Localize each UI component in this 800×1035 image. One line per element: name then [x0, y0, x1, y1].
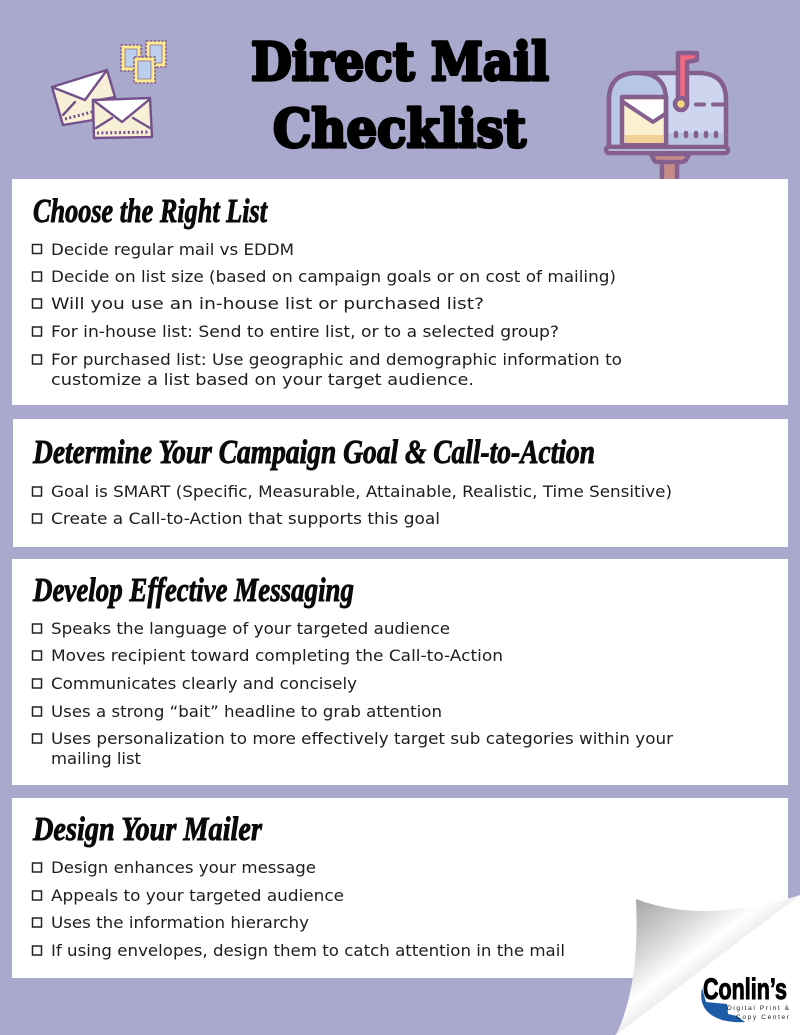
heading: design: Design Your Mailer: [32, 811, 263, 848]
heading: campaign goal: Determine Your Campaign Goal & Call-to-Action: [32, 434, 595, 471]
checklist: list items: [32, 240, 622, 389]
checklist: list items: customize a list based on your target audience.: [51, 370, 474, 389]
shelf: [606, 147, 728, 153]
checklist: list items: Decide on list size (based on campaign goals or on cost of mailing): [51, 267, 616, 286]
heading: messaging: Develop Effective Messaging: [32, 572, 354, 609]
checklist: goal items: Create a Call-to-Action that supports this goal: [51, 509, 440, 528]
checklist: messaging items: Moves recipient toward completing the Call-to-Action: [51, 646, 503, 665]
logo: Conlin's: Digital Print &: [727, 1005, 790, 1012]
letter: [622, 97, 666, 145]
checklist: list items: Will you use an in-house list or purchased list?: [51, 294, 484, 313]
checklist: design items: Appeals to your targeted audience: [51, 886, 344, 905]
checklist: messaging items: Communicates clearly and concisely: [51, 674, 357, 693]
page curl: [615, 895, 800, 1035]
checklist: list items: For purchased list: Use geographic and demographic information to: [51, 350, 622, 369]
dashes: [696, 102, 724, 106]
title: [251, 32, 549, 160]
post: [662, 158, 677, 182]
door: [609, 73, 666, 147]
logo: Conlin's: Copy Center: [736, 1014, 790, 1021]
checklist: messaging items: [32, 619, 673, 768]
icon: mailbox: [606, 53, 728, 182]
checklist: list items: For in-house list: Send to entire list, or to a selected group?: [51, 322, 559, 341]
checklist: list items: Decide regular mail vs EDDM: [51, 240, 294, 259]
checklist: goal items: Goal is SMART (Specific, Measurable, Attainable, Realistic, Time Sensitive): [51, 482, 672, 501]
panel: choose the right list: [12, 179, 788, 405]
checklist: messaging items: Uses personalization to more effectively target sub categories within your: [51, 729, 673, 748]
heading: choose the right list: Choose the Right List: [33, 193, 268, 230]
checklist: messaging items: Speaks the language of your targeted audience: [51, 619, 450, 638]
checklist: goal items: [32, 482, 672, 528]
flag: [678, 53, 697, 104]
title: Checklist: [273, 99, 526, 160]
checklist: messaging items: mailing list: [51, 749, 141, 768]
checklist: design items: [32, 858, 565, 960]
panel: campaign goal and call-to-action: [13, 419, 788, 547]
body: [609, 73, 726, 147]
icon: envelope back: [52, 70, 115, 125]
panel: design your mailer: [12, 798, 788, 978]
panel: develop effective messaging: [12, 559, 788, 785]
logo: Conlin's: [701, 973, 790, 1022]
checklist: design items: Design enhances your message: [51, 858, 316, 877]
checklist: design items: If using envelopes, design them to catch attention in the mail: [51, 941, 565, 960]
title: Direct Mail: [251, 32, 549, 93]
checklist: design items: Uses the information hierarchy: [51, 913, 309, 932]
icon: stamps: [121, 41, 166, 83]
checklist: messaging items: Uses a strong “bait” headline to grab attention: [51, 702, 442, 721]
icon: envelope front: [93, 98, 152, 138]
